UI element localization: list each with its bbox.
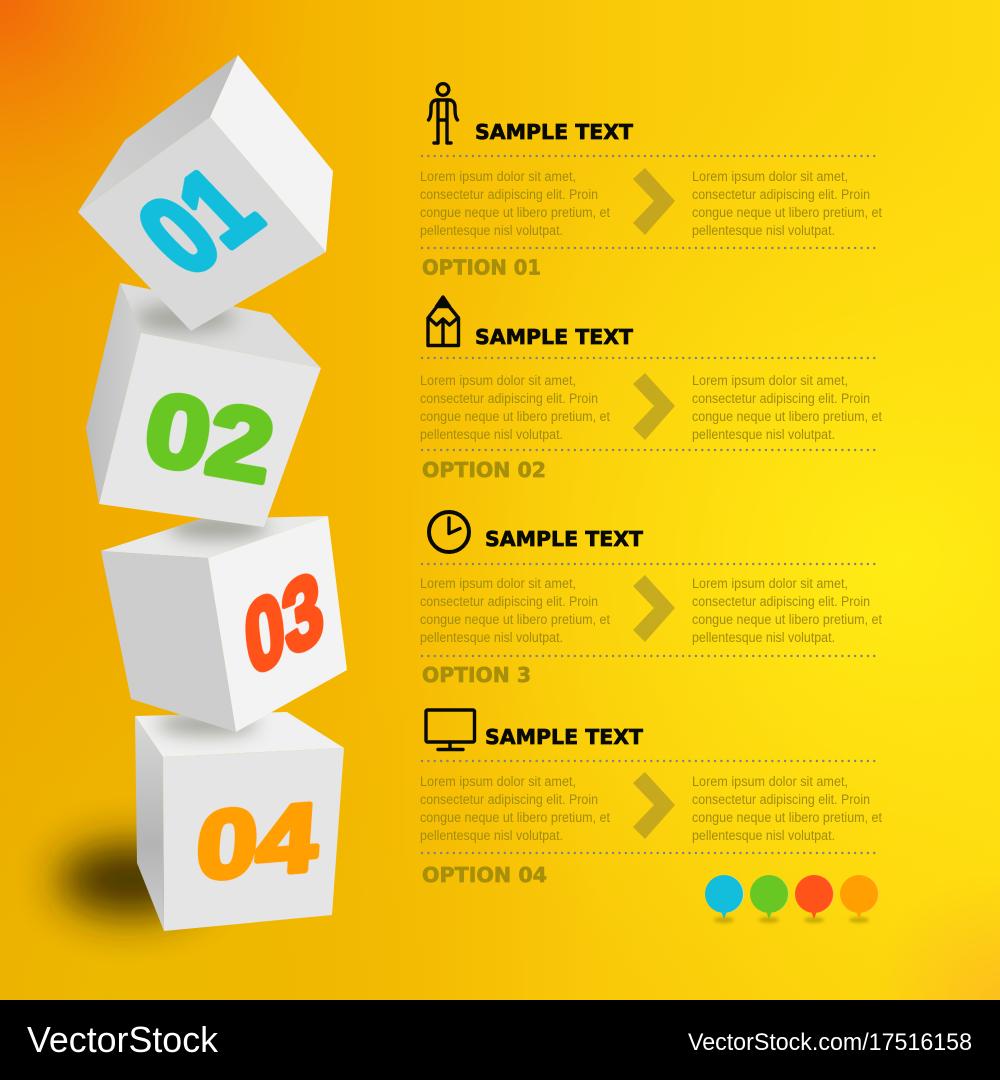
text column 1 left: consectetur adipiscing elit. Proin xyxy=(420,187,598,202)
text column 3 left: consectetur adipiscing elit. Proin xyxy=(420,594,598,609)
text column 3 left: pellentesque nisl volutpat. xyxy=(420,630,563,645)
text column 2 right xyxy=(692,373,882,442)
arrow 3 xyxy=(633,575,675,642)
heading 3: SAMPLE TEXT xyxy=(485,527,643,551)
text column 1 left: pellentesque nisl volutpat. xyxy=(420,223,563,238)
text column 4 left: Lorem ipsum dolor sit amet, xyxy=(420,774,576,789)
pin: orange xyxy=(840,875,879,923)
text column 2 right: pellentesque nisl volutpat. xyxy=(692,427,835,442)
ground shadow xyxy=(58,844,202,916)
text column 4 left xyxy=(420,774,610,843)
text column 2 left xyxy=(420,373,610,442)
text column 1 right: consectetur adipiscing elit. Proin xyxy=(692,187,870,202)
heading 4: SAMPLE TEXT xyxy=(485,725,643,749)
text column 1 right: pellentesque nisl volutpat. xyxy=(692,223,835,238)
text column 1 right: Lorem ipsum dolor sit amet, xyxy=(692,169,848,184)
text column 2 left: consectetur adipiscing elit. Proin xyxy=(420,391,598,406)
heading 2: SAMPLE TEXT xyxy=(475,325,633,349)
text column 3 left: congue neque ut libero pretium, et xyxy=(420,612,610,627)
pin: red xyxy=(795,875,834,923)
number 04: 04 xyxy=(194,784,321,899)
text column 3 left xyxy=(420,576,610,645)
text column 4 right: pellentesque nisl volutpat. xyxy=(692,828,835,843)
text column 2 right: Lorem ipsum dolor sit amet, xyxy=(692,373,848,388)
text column 1 left: congue neque ut libero pretium, et xyxy=(420,205,610,220)
cube 04 xyxy=(135,712,344,931)
pin: blue xyxy=(705,875,744,923)
icon: clock xyxy=(429,512,469,552)
text column 2 left: Lorem ipsum dolor sit amet, xyxy=(420,373,576,388)
footer bar xyxy=(0,1000,1000,1080)
section 3 xyxy=(420,512,882,687)
cube 03 xyxy=(101,515,347,732)
option label 1: OPTION 01 xyxy=(422,256,541,280)
option label 3: OPTION 3 xyxy=(422,663,531,687)
heading 1: SAMPLE TEXT xyxy=(475,120,633,144)
number 02: 02 xyxy=(137,370,281,504)
text column 1 right xyxy=(692,169,882,238)
arrow 1 xyxy=(633,168,675,235)
pin: green xyxy=(750,875,789,923)
section 2 xyxy=(420,297,882,482)
text column 4 left: pellentesque nisl volutpat. xyxy=(420,828,563,843)
footer brand: VectorStock xyxy=(27,1019,219,1060)
text column 2 left: congue neque ut libero pretium, et xyxy=(420,409,610,424)
text column 4 left: congue neque ut libero pretium, et xyxy=(420,810,610,825)
text column 4 right xyxy=(692,774,882,843)
text column 4 right: Lorem ipsum dolor sit amet, xyxy=(692,774,848,789)
legend pins xyxy=(705,875,879,923)
text column 1 left xyxy=(420,169,610,238)
text column 3 right: consectetur adipiscing elit. Proin xyxy=(692,594,870,609)
text column 2 right: congue neque ut libero pretium, et xyxy=(692,409,882,424)
text column 3 right: pellentesque nisl volutpat. xyxy=(692,630,835,645)
option label 2: OPTION 02 xyxy=(422,458,546,482)
text column 3 right: Lorem ipsum dolor sit amet, xyxy=(692,576,848,591)
text column 4 left: consectetur adipiscing elit. Proin xyxy=(420,792,598,807)
arrow 2 xyxy=(633,373,675,440)
icon: monitor xyxy=(426,710,474,750)
text column 3 right xyxy=(692,576,882,645)
option label 4: OPTION 04 xyxy=(422,863,547,887)
number 01: 01 xyxy=(114,145,283,297)
text column 2 right: consectetur adipiscing elit. Proin xyxy=(692,391,870,406)
arrow 4 xyxy=(633,772,675,839)
text column 1 left: Lorem ipsum dolor sit amet, xyxy=(420,169,576,184)
icon: person xyxy=(428,84,458,143)
cube 01 xyxy=(78,55,333,331)
text column 4 right: congue neque ut libero pretium, et xyxy=(692,810,882,825)
text column 1 right: congue neque ut libero pretium, et xyxy=(692,205,882,220)
text column 3 left: Lorem ipsum dolor sit amet, xyxy=(420,576,576,591)
text column 3 right: congue neque ut libero pretium, et xyxy=(692,612,882,627)
cube 02 xyxy=(86,283,321,527)
section 1 xyxy=(420,84,882,280)
footer image id: VectorStock.com/17516158 xyxy=(688,1029,972,1056)
section 4 xyxy=(420,710,882,887)
icon: pencil xyxy=(428,297,458,346)
text column 4 right: consectetur adipiscing elit. Proin xyxy=(692,792,870,807)
number 03: 03 xyxy=(239,549,328,697)
text column 2 left: pellentesque nisl volutpat. xyxy=(420,427,563,442)
